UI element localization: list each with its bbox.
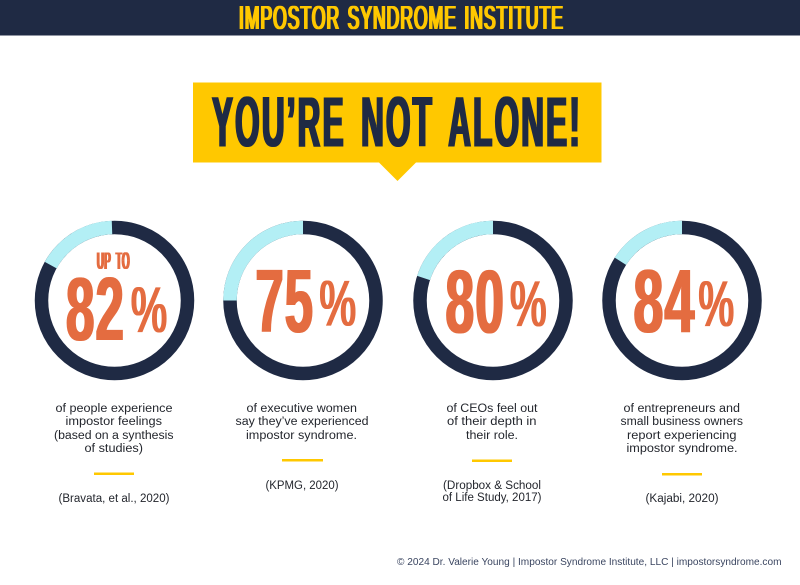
description — [620, 403, 743, 455]
description: of their depth in — [447, 416, 536, 428]
description: their role. — [466, 430, 518, 442]
divider — [472, 460, 512, 462]
footer credit: © 2024 Dr. Valerie Young | Impostor Syndrome Institute, LLC | impostorsyndrome.com — [397, 557, 782, 568]
citation: of Life Study, 2017) — [442, 492, 542, 504]
speech bubble banner — [193, 82, 602, 181]
description: impostor syndrome. — [246, 430, 357, 442]
donut ring 75% — [230, 228, 376, 374]
donut ring 82% — [42, 228, 188, 374]
donut ring 80% — [420, 228, 566, 374]
description — [446, 403, 538, 442]
panel: stat 82% — [42, 228, 188, 505]
citation: (KPMG, 2020) — [266, 480, 339, 492]
description: of entrepreneurs and — [624, 403, 740, 415]
description: impostor syndrome. — [626, 443, 738, 455]
panel: stat 80% — [420, 228, 566, 504]
description: say they’ve experienced — [236, 416, 368, 428]
description: of executive women — [246, 403, 357, 415]
description — [236, 403, 368, 442]
number 84: 84 — [634, 252, 696, 352]
percent sign: % — [131, 273, 167, 346]
percent sign: % — [698, 267, 734, 340]
description: of people experience — [56, 403, 172, 415]
number 82: 82 — [66, 260, 125, 360]
divider — [282, 459, 323, 462]
citation — [442, 480, 542, 504]
percent sign: % — [320, 266, 356, 340]
number 80: 80 — [446, 252, 505, 352]
citation: (Dropbox & School — [443, 480, 541, 492]
divider — [662, 473, 702, 476]
description: report experiencing — [627, 430, 736, 442]
donut ring 84% — [609, 228, 755, 374]
description: impostor feelings — [66, 416, 162, 428]
description: of studies) — [84, 443, 143, 455]
panel: stat 75% — [230, 228, 376, 492]
description: small business owners — [620, 416, 743, 428]
percent sign: % — [510, 267, 546, 340]
panel: stat 82%: UP TO — [97, 248, 130, 275]
citation: (Kajabi, 2020) — [646, 493, 719, 505]
divider — [94, 472, 134, 475]
header bar — [0, 0, 800, 37]
panel: stat 84% — [609, 228, 755, 505]
description: (based on a synthesis — [54, 430, 174, 442]
description — [54, 403, 174, 455]
number 75: 75 — [256, 252, 314, 352]
description: of CEOs feel out — [446, 403, 538, 415]
citation: (Bravata, et al., 2020) — [58, 493, 170, 505]
